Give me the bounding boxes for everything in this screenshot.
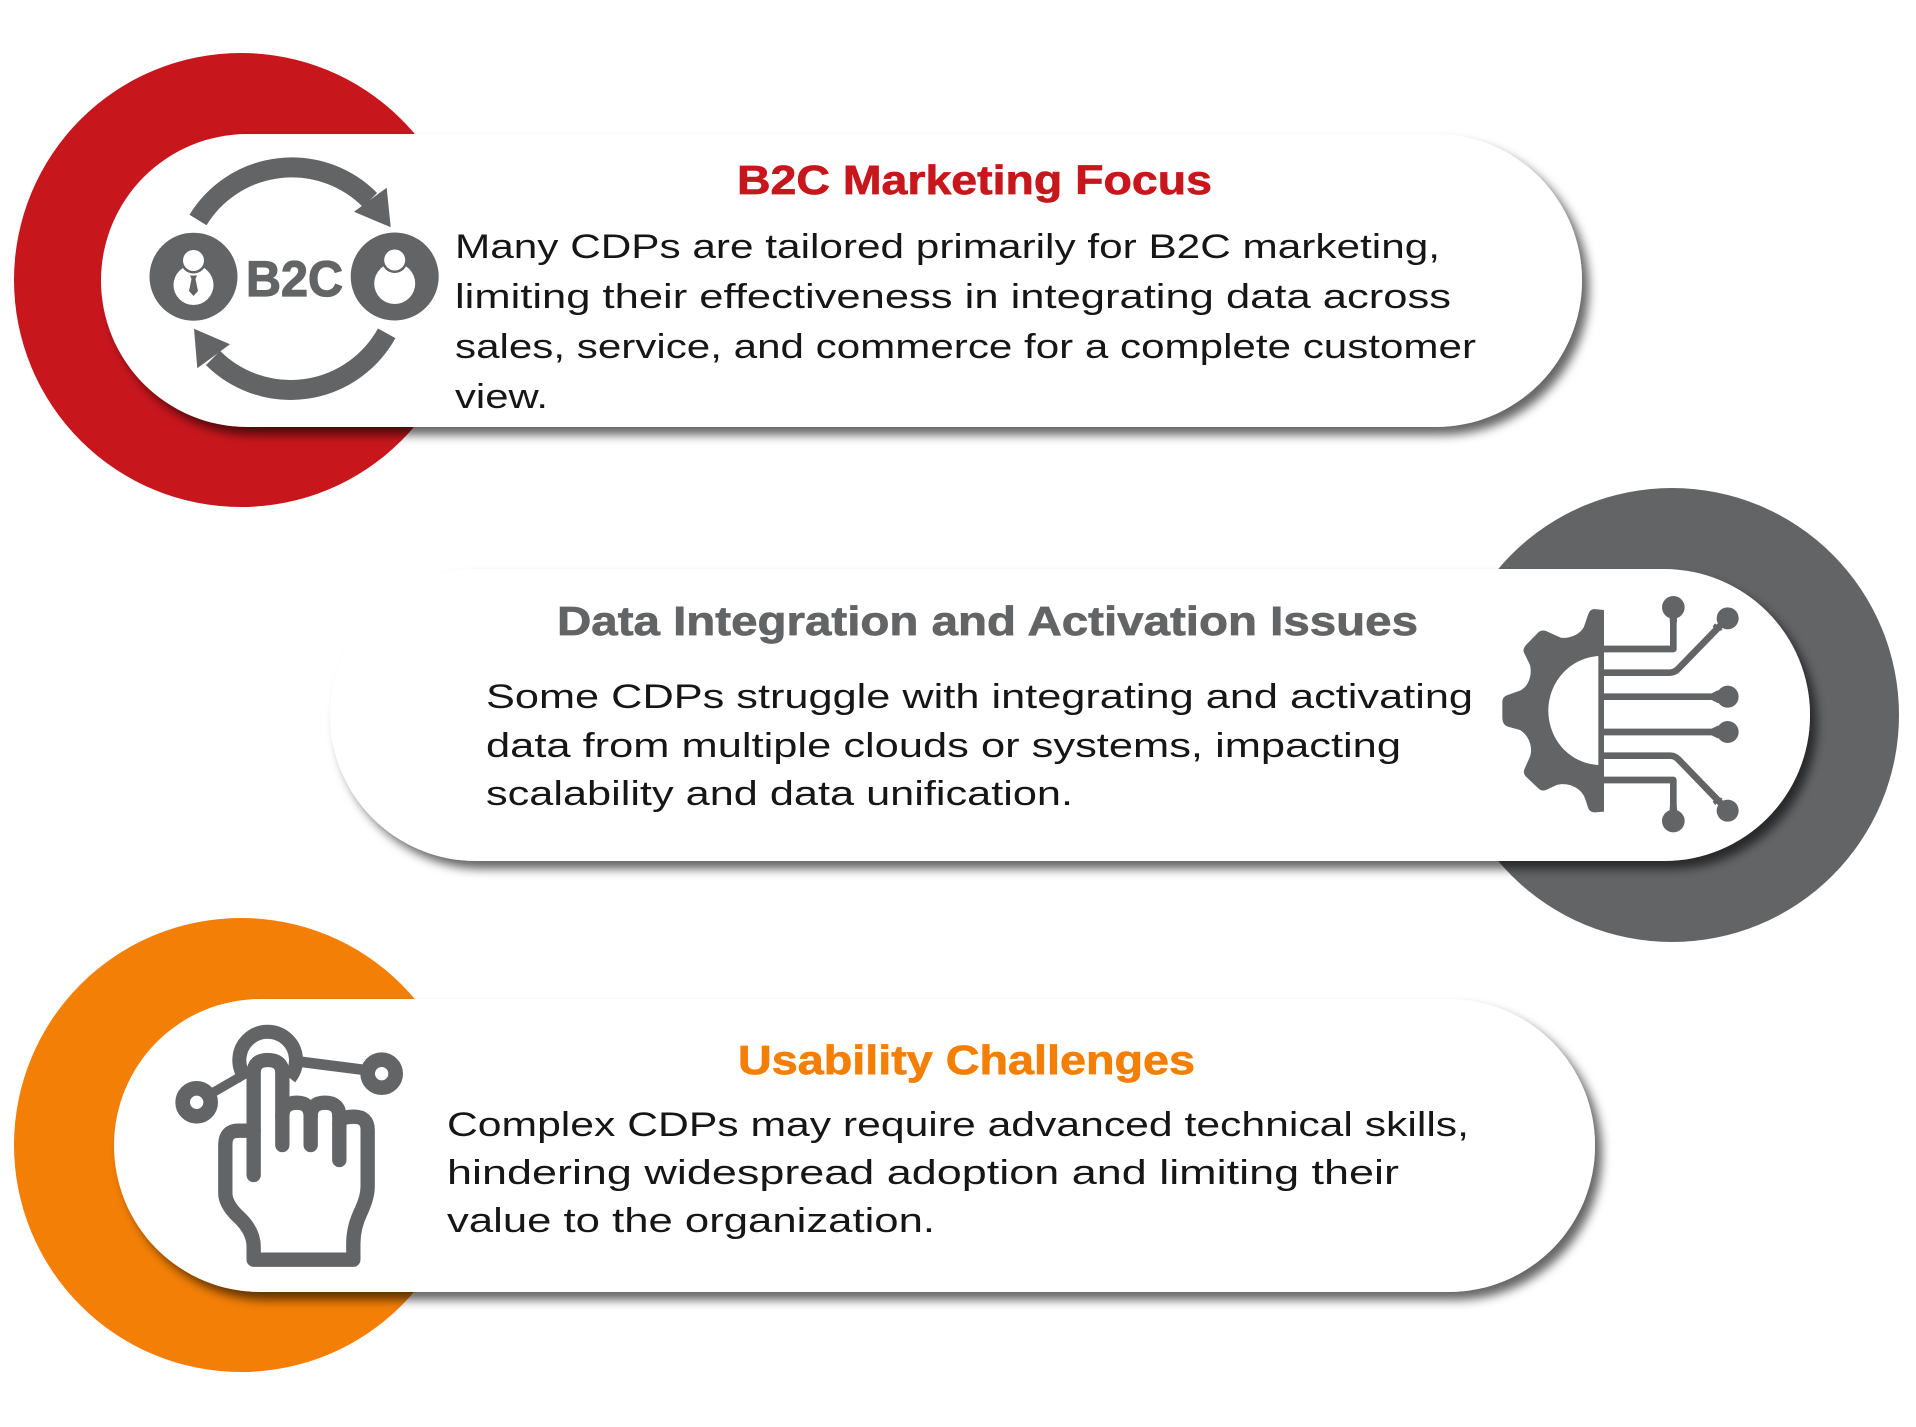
circuit traces xyxy=(1603,608,1727,820)
hand outline xyxy=(225,1060,368,1260)
body text: Many CDPs are tailored primarily for B2C marketing, xyxy=(455,228,1440,266)
white pill card xyxy=(330,569,1810,861)
red accent circle xyxy=(14,53,468,507)
heading: B2C Marketing Focus: B2C Marketing Focus xyxy=(737,157,1212,203)
orange accent circle xyxy=(14,918,468,1372)
body text: Complex CDPs may require advanced technical skills, xyxy=(447,1106,1469,1144)
body text: data from multiple clouds or systems, impacting xyxy=(486,727,1401,765)
icon: hand touch xyxy=(183,1032,396,1260)
customer badge xyxy=(351,232,439,320)
body text: hindering widespread adoption and limiting their xyxy=(447,1154,1399,1192)
heading: Usability Challenges: Usability Challenges xyxy=(738,1037,1195,1083)
body text xyxy=(455,228,1476,416)
white pill card xyxy=(114,999,1595,1292)
gray accent circle xyxy=(1445,488,1899,942)
panel: Usability Challenges xyxy=(14,918,1595,1372)
business person badge xyxy=(150,233,238,321)
body text xyxy=(486,678,1473,813)
heading: Data Integration and Activation Issues: Data Integration and Activation Issues xyxy=(557,598,1418,644)
B2C label: B2C xyxy=(246,251,343,307)
body text: limiting their effectiveness in integrating data across xyxy=(455,278,1451,316)
half gear xyxy=(1502,609,1604,812)
body text: Some CDPs struggle with integrating and activating xyxy=(486,678,1473,716)
bottom cycle arrow xyxy=(194,329,387,390)
panel: Data Integration and Activation Issues xyxy=(330,488,1899,942)
body text xyxy=(447,1106,1469,1240)
touch ring and connectors xyxy=(183,1032,396,1116)
panel: B2C Marketing Focus xyxy=(14,53,1582,507)
body text: scalability and data unification. xyxy=(486,775,1073,813)
top cycle arrow xyxy=(198,167,391,227)
circuit nodes xyxy=(1662,596,1739,832)
white pill card xyxy=(101,134,1582,427)
body text: sales, service, and commerce for a complete customer xyxy=(455,328,1476,366)
icon: B2C cycle xyxy=(150,167,439,390)
body text: view. xyxy=(455,378,548,416)
icon: gear with circuits xyxy=(1502,596,1739,832)
body text: value to the organization. xyxy=(447,1202,935,1240)
